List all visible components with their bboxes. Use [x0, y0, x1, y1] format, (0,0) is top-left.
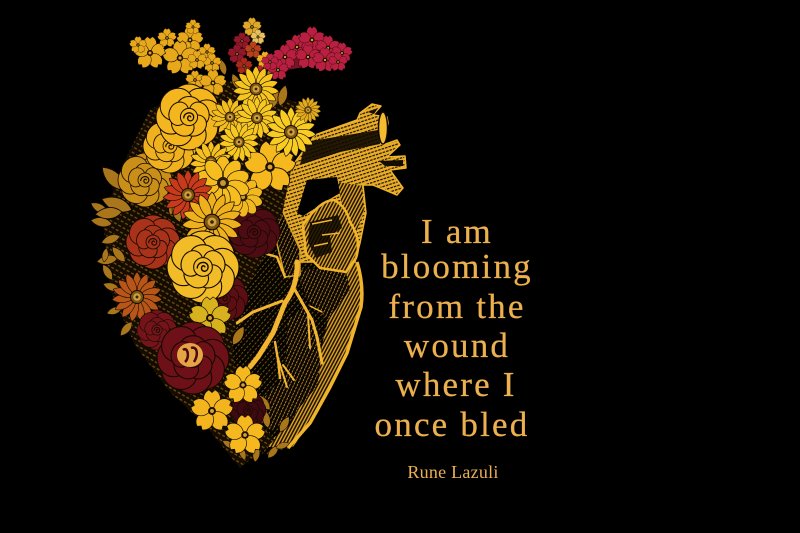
spray: dark red delphinium: [227, 17, 274, 79]
gerbera: red: [163, 170, 213, 220]
flower mass underlay: [103, 80, 310, 468]
flowers: roses and blooms on the left of the heart: [112, 66, 321, 456]
auricle dark markings: [308, 215, 342, 258]
upper branch opening: [368, 108, 378, 114]
poem text: once bled: [375, 405, 529, 444]
flower: burnt orange: [112, 272, 162, 322]
rose: dark red upper: [226, 204, 282, 260]
rose: dark red middle: [198, 272, 250, 324]
poem text: wound: [404, 326, 510, 365]
right ventricle hatching: [262, 262, 362, 447]
daisy: right: [266, 107, 316, 157]
rose: big yellow: [164, 228, 242, 306]
blossom: yellow small: [187, 297, 233, 340]
daisy: large golden: [182, 192, 242, 252]
daisy: centre: [219, 122, 259, 162]
daisy: top: [233, 66, 279, 112]
arch cavity right hatching: [338, 182, 364, 232]
blossom: orange yellow: [242, 141, 298, 194]
pulmonary trunk: [270, 212, 300, 277]
blossom: yellow middle low: [189, 390, 235, 433]
heart: anatomical engraving: [230, 104, 406, 455]
daisy: upper centre: [236, 97, 278, 139]
blossom: yellow lowest: [223, 415, 267, 456]
author name: Rune Lazuli: [407, 462, 499, 482]
right branch shadow: [379, 160, 403, 166]
great vessels: aorta and arch: [275, 104, 406, 262]
left auricle: [303, 200, 358, 272]
blossom: dark red low: [229, 391, 267, 429]
rose: gold upper: [154, 82, 224, 152]
rose: dark gold left: [116, 151, 174, 209]
spray: crimson hyacinth: [261, 27, 353, 81]
rose: gold lower: [141, 117, 199, 175]
poem text: blooming: [381, 247, 533, 286]
central ventricle hatching: [262, 305, 322, 432]
upper ventricle hatching: [296, 268, 350, 320]
daisy: upper left: [211, 98, 249, 136]
arch cavity: [297, 177, 340, 216]
poem text: [375, 212, 533, 444]
small top right flower: [295, 97, 321, 123]
flower: large yellow: [195, 156, 251, 210]
lily: red orange: [124, 213, 182, 271]
shadow under aorta arm: [300, 130, 380, 165]
rose: small dark red: [136, 309, 178, 351]
poem text: I am: [421, 212, 493, 251]
foliage: left and bottom sprigs: [89, 58, 292, 463]
spray: yellow delphinium: [129, 19, 227, 97]
coronary arteries: [237, 245, 322, 387]
blossom: yellow upper low: [222, 366, 264, 405]
flower: yellow small: [222, 177, 264, 217]
poem text: from the: [388, 287, 526, 326]
poem text: where I: [395, 365, 517, 404]
auricle highlight strokes: [312, 220, 340, 246]
rose: big dark red: [154, 319, 232, 397]
aorta opening: [378, 112, 388, 144]
heart ventricle body: [230, 225, 362, 455]
daisy: lower: [190, 141, 232, 183]
heart right edge: [288, 262, 362, 448]
